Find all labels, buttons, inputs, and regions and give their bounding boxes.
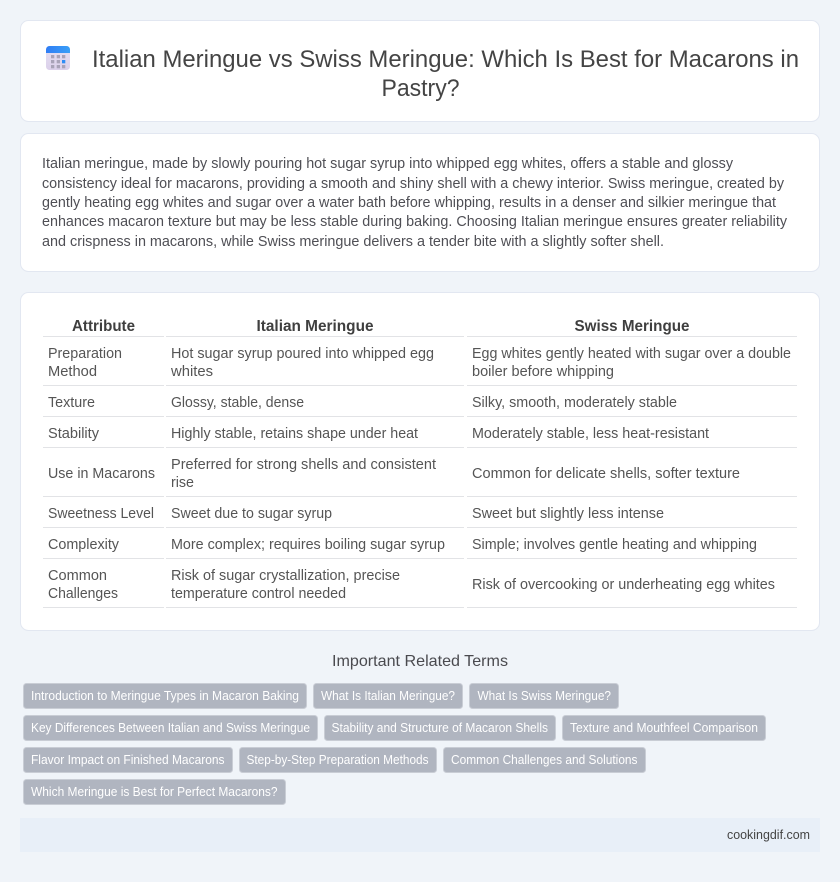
row: stability: Moderately stable, less heat-resistant (472, 426, 709, 442)
row: preparation method (48, 346, 791, 380)
row: sweetness level: Sweet but slightly less intense (472, 506, 664, 522)
row: texture: Glossy, stable, dense (171, 395, 304, 411)
tag: Step-by-Step Preparation Methods (246, 753, 428, 767)
row: preparation method: whites (170, 364, 213, 380)
tag (444, 748, 646, 772)
text block: introduction: Italian meringue, made by slowly pouring hot sugar syrup into whipped egg whites, offers a stable and glossy (42, 156, 734, 172)
text block: introduction: enhances macaron texture but may be less stable during baking. Choosing Italian meringue ensures greater reliability (42, 214, 788, 230)
tag (240, 748, 436, 772)
tag: Texture and Mouthfeel Comparison (570, 721, 758, 735)
row: texture: Silky, smooth, moderately stable (472, 395, 677, 411)
heading: important related terms: Important Related Terms (332, 653, 508, 670)
tag: What Is Italian Meringue? (321, 689, 455, 703)
row: preparation method: Method (48, 364, 97, 380)
tag (24, 716, 318, 740)
tag: Common Challenges and Solutions (451, 753, 638, 767)
tag: Which Meringue is Best for Perfect Macarons? (31, 785, 278, 799)
row: preparation method: boiler before whipping (472, 364, 614, 380)
row: common challenges: temperature control needed (171, 586, 346, 602)
tag: Introduction to Meringue Types in Macaron Baking (31, 689, 299, 703)
tag (562, 716, 766, 740)
row: complexity: Complexity (48, 537, 120, 553)
text block: introduction: and crispness in macarons, while Swiss meringue delivers a tender bite with a slightly softer shell. (42, 234, 664, 250)
row: stability (48, 426, 709, 442)
tag: Flavor Impact on Finished Macarons (31, 753, 224, 767)
tag (24, 780, 286, 804)
row: use in macarons: Common for delicate shells, softer texture (472, 466, 740, 482)
table header: Swiss Meringue (574, 318, 690, 335)
title: Pastry? (382, 75, 460, 102)
related term tags (24, 684, 766, 804)
row: use in macarons: Use in Macarons (48, 466, 155, 482)
tag: Key Differences Between Italian and Swiss Meringue (31, 721, 310, 735)
footer (20, 818, 820, 852)
row: preparation method: Preparation (48, 346, 122, 362)
text block: introduction: consistency ideal for macarons, providing a smooth and shiny shell with a chewy interior. Swiss meringue, created by (42, 176, 785, 192)
table header (72, 318, 690, 335)
row: use in macarons (48, 457, 740, 491)
tag: Stability and Structure of Macaron Shells (332, 721, 548, 735)
row: use in macarons: Preferred for strong shells and consistent (171, 457, 436, 473)
tag (24, 684, 306, 708)
tag (470, 684, 618, 708)
title: Italian Meringue vs Swiss Meringue: Which Is Best for Macarons in (92, 46, 799, 73)
row: stability: Stability (48, 426, 100, 442)
footer source: cookingdif.com (727, 827, 810, 842)
panel: comparison table (20, 292, 820, 630)
row: common challenges: Common (48, 568, 107, 584)
row: complexity: More complex; requires boiling sugar syrup (171, 537, 445, 553)
panel: introduction (20, 134, 820, 272)
row: complexity (48, 537, 757, 553)
tag (324, 716, 556, 740)
row: sweetness level (48, 506, 664, 522)
row: complexity: Simple; involves gentle heating and whipping (472, 537, 757, 553)
row: sweetness level: Sweet due to sugar syrup (171, 506, 332, 522)
tag (24, 748, 232, 772)
text block: introduction: gently heating egg whites and sugar over a water bath before whipping, results in a denser and silkier meringue that (42, 195, 776, 211)
table header: Italian Meringue (256, 318, 374, 335)
table header: Attribute (72, 318, 135, 335)
panel: title (20, 20, 820, 122)
title (92, 46, 799, 102)
row: stability: Highly stable, retains shape under heat (171, 426, 418, 442)
tag: What Is Swiss Meringue? (478, 689, 611, 703)
row: common challenges: Risk of overcooking or underheating egg whites (472, 577, 775, 593)
tag (314, 684, 462, 708)
row: common challenges: Risk of sugar crystallization, precise (171, 568, 400, 584)
row: use in macarons: rise (171, 475, 194, 491)
text block: introduction (42, 156, 788, 250)
row: texture (48, 395, 677, 411)
icon: calendar (46, 46, 70, 70)
row: texture: Texture (48, 395, 95, 411)
row: common challenges (48, 568, 775, 602)
row: sweetness level: Sweetness Level (48, 506, 154, 522)
row: preparation method: Hot sugar syrup poured into whipped egg (171, 346, 434, 362)
row: common challenges: Challenges (48, 586, 118, 602)
row: preparation method: Egg whites gently heated with sugar over a double (472, 346, 791, 362)
